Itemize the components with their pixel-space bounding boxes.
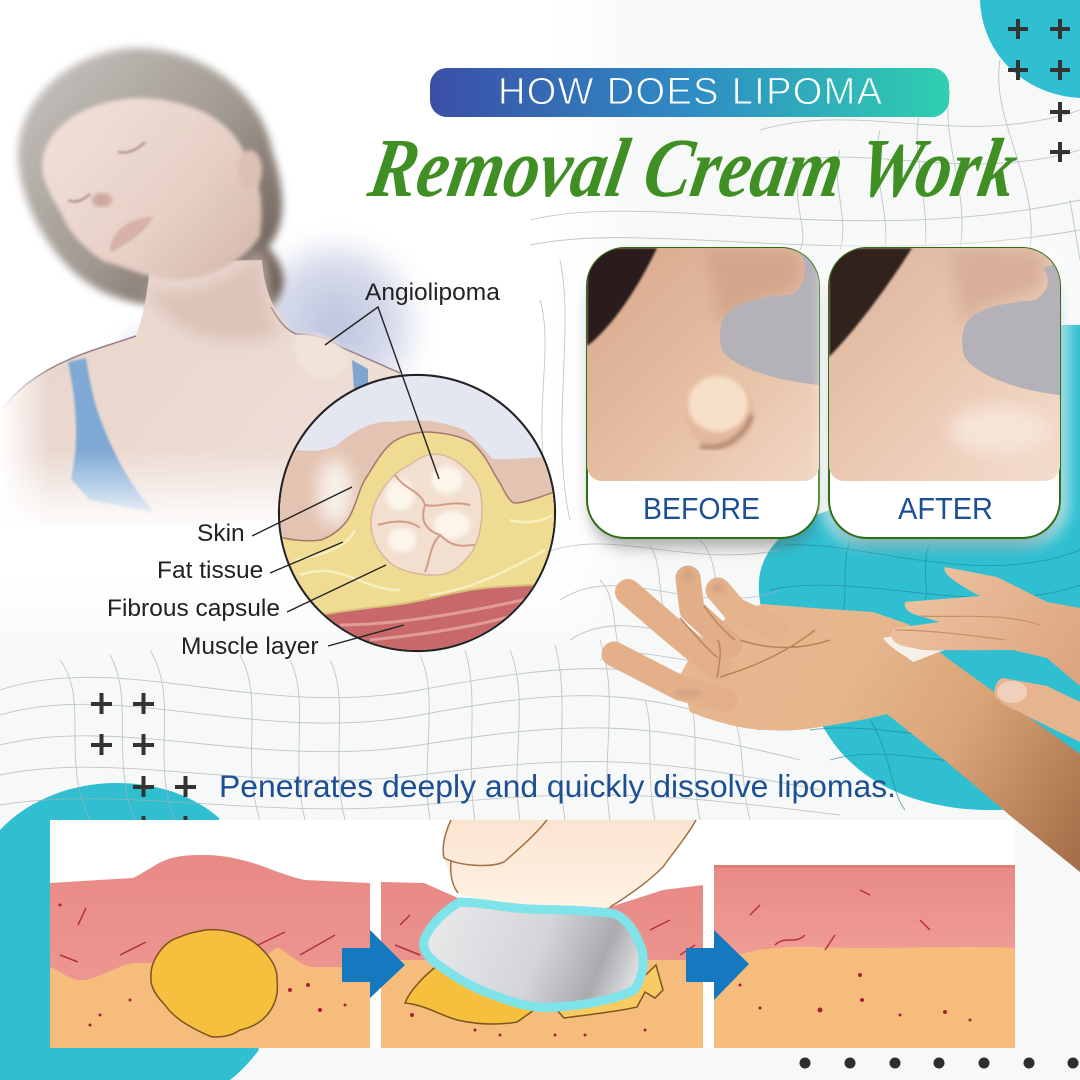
step 3: healed skin (714, 865, 1015, 1048)
teal shape behind hands (759, 325, 1080, 810)
photo: hair (587, 248, 657, 346)
step 2: patch pressed on skin (381, 820, 703, 1048)
plus signs lower left (91, 693, 196, 822)
index finger (628, 592, 718, 668)
before card (587, 248, 819, 548)
bottom and left fade (0, 450, 300, 532)
after card: AFTER (898, 491, 993, 526)
thumbnail (997, 681, 1027, 703)
blue halo (230, 220, 440, 430)
palm and forearm (680, 604, 1080, 872)
teal shape bottom left (0, 783, 259, 1080)
hair (18, 48, 283, 310)
anatomy labels: Fat tissue (157, 557, 263, 584)
face (42, 98, 262, 280)
callout lines (252, 307, 439, 646)
hands applying cream (614, 567, 1080, 872)
thumb (614, 654, 725, 700)
lump on shoulder (294, 334, 347, 378)
plus signs top right (1008, 19, 1070, 162)
applying hand thumb (994, 678, 1080, 742)
middle finger (688, 578, 730, 645)
shoulder outline (0, 307, 400, 412)
finger (443, 820, 696, 910)
applying hand fingers (891, 567, 1080, 686)
dissolving fat right (557, 965, 663, 1018)
cream smear (883, 636, 945, 662)
title pill: HOW DOES LIPOMA (498, 71, 883, 113)
photo: neck shadow (710, 248, 804, 319)
neck and shoulders (0, 260, 400, 530)
three-step skin diagram (50, 820, 1015, 1048)
anatomy labels: Fibrous capsule (107, 595, 280, 622)
photo: grey background (720, 248, 819, 385)
photo: lump (690, 396, 754, 448)
closed eyes (68, 142, 145, 202)
dots row (800, 1058, 1078, 1068)
lipoma mass (371, 454, 482, 575)
anatomy labels: Muscle layer (181, 633, 319, 660)
arrow 1 (342, 930, 405, 998)
ear (238, 150, 262, 190)
teal corner shape top right (980, 0, 1080, 98)
photo: grey background (962, 262, 1060, 395)
photo: neck shadow (950, 248, 1048, 320)
after card (822, 242, 1068, 548)
anatomy labels: Skin (197, 520, 245, 547)
neck shadow (145, 250, 280, 341)
dissolving fat left (405, 960, 537, 1024)
palm crease lines (680, 606, 830, 678)
lips (110, 216, 153, 252)
title pill (430, 68, 949, 117)
tank top strap left (68, 358, 154, 512)
photo: highlight (950, 406, 1050, 454)
tank top strap right (352, 360, 368, 389)
photo: hair (829, 248, 912, 357)
gel patch (424, 902, 643, 1008)
caption: Penetrates deeply and quickly dissolve lipomas. (219, 768, 896, 804)
warped grid lines (0, 60, 1080, 820)
illustration: woman with angiolipoma (0, 48, 440, 532)
arrow 2 (686, 930, 749, 1000)
fingertip shading (674, 570, 724, 697)
step 1: skin with lipoma (50, 855, 370, 1048)
nose shadow (92, 193, 112, 207)
cross-section circle (278, 374, 556, 652)
ring finger (718, 590, 775, 628)
anatomy labels (107, 279, 500, 660)
before card: BEFORE (643, 491, 760, 526)
anatomy labels: Angiolipoma (365, 279, 500, 306)
